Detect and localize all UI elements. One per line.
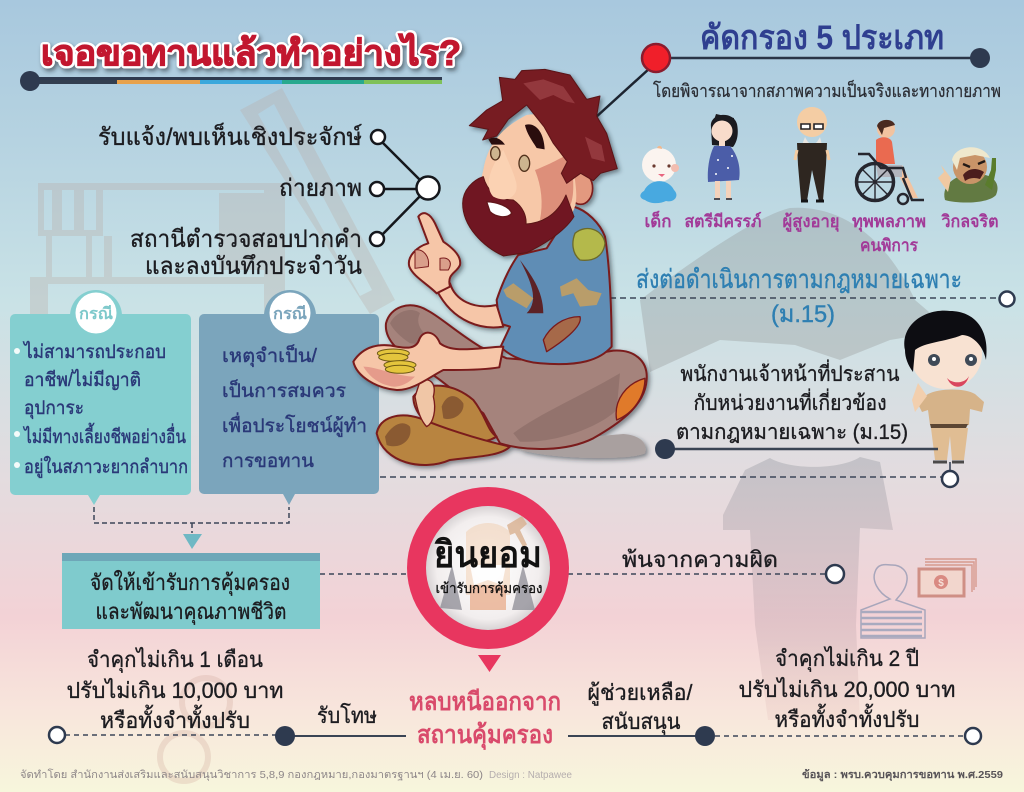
circle: consent to protection: ยินยอม: [434, 534, 542, 575]
icon: mentally ill man: [938, 147, 998, 203]
connector: man to red dot: [595, 68, 650, 118]
panel: case one: กรณี: [79, 304, 113, 323]
connector: three points to hub: [370, 130, 440, 246]
labels: five person types: สตรีมีครรภ์: [684, 211, 762, 231]
text: ways of finding a beggar: และลงบันทึกประจำวัน: [145, 253, 362, 280]
text: release from guilt: พ้นจากความผิด: [622, 547, 778, 572]
panel: case two: เพื่อประโยชน์ผู้ทำ: [222, 412, 367, 437]
front shoe: [377, 415, 510, 465]
watermark: handcuffs: [160, 678, 230, 781]
panel: case one: อาชีพ/ไม่มีญาติ: [24, 369, 141, 391]
text: penalty for beggar: จำคุกไม่เกิน 1 เดือน: [87, 647, 263, 673]
panel: case two: การขอทาน: [222, 451, 314, 472]
text: officer coordinates: ตามกฎหมายเฉพาะ (ม.15): [676, 421, 908, 444]
text: ways of finding a beggar: สถานีตำรวจสอบปากคำ: [130, 226, 362, 253]
watermark: hat silhouette: [640, 208, 950, 372]
footer: credit: จัดทำโดย สำนักงานส่งเสริมและสนับสนุนวิชาการ 5,8,9 กองกฎหมาย,กองมาตรฐานฯ (4 เม.ย. 60): [20, 768, 483, 781]
dashed line: shelter to consent: [320, 573, 408, 575]
icon: banknotes: $: [938, 578, 944, 589]
icon: baby: [640, 146, 679, 203]
elbow patch: [543, 317, 580, 352]
text: escape from shelter: สถานคุ้มครอง: [417, 721, 553, 751]
timeline: bottom penalties: [49, 726, 981, 746]
ear: [569, 172, 593, 204]
knee patch: [616, 378, 645, 420]
dashed line: consent to release: [568, 573, 826, 575]
circle: consent to protection: [407, 487, 569, 649]
text: refer to specific law: (ม.15): [771, 301, 835, 328]
text: penalty for helpers: จำคุกไม่เกิน 2 ปี: [775, 646, 919, 672]
watermark: torn shirt silhouette: [723, 457, 893, 720]
circle: consent to protection: เข้ารับการคุ้มครอง: [436, 580, 542, 597]
palm shade: [363, 367, 415, 387]
mouth: [487, 202, 512, 217]
dashed line: below the man: [380, 476, 945, 478]
raised hand: [409, 213, 460, 293]
line: officer timeline node: [655, 439, 938, 459]
text: penalty for beggar: [66, 647, 284, 733]
arrow: down to shelter box: [183, 534, 202, 549]
picture: court scene: [440, 516, 535, 610]
node: referral endpoint: [1000, 292, 1014, 306]
zigzag patches: [503, 278, 602, 308]
heading rule with dots: [642, 44, 990, 72]
icon: pregnant woman: [708, 114, 740, 199]
text: ways of finding a beggar: ถ่ายภาพ: [279, 175, 362, 202]
panel: protection and life development: จัดให้เข้ารับการคุ้มครอง: [90, 570, 290, 596]
text: accept penalty: รับโทษ: [317, 703, 377, 728]
text: helpers and supporters: ผู้ช่วยเหลือ/: [588, 680, 693, 706]
panel: case one: ไม่สามารถประกอบ: [22, 341, 166, 363]
ground shadow: [520, 434, 646, 458]
beard: [463, 177, 574, 256]
title: เจอขอทานแล้วทำอย่างไร?: [41, 32, 461, 73]
icon: banknotes: [919, 559, 976, 596]
title underline bar: [20, 71, 442, 91]
shirt tear: [520, 260, 543, 313]
panel: case one: [10, 290, 191, 505]
toes: [415, 380, 435, 427]
icon: elderly man: [795, 107, 829, 201]
text: escape from shelter: [409, 688, 561, 751]
trouser shading: [390, 310, 620, 442]
text: escape from shelter: หลบหนีออกจาก: [409, 688, 561, 716]
labels: five person types: คนพิการ: [860, 236, 919, 255]
shoulder patch: [573, 229, 605, 260]
hair: [469, 69, 617, 183]
face: [480, 114, 576, 242]
labels: five person types: ผู้สูงอายุ: [782, 212, 840, 233]
icon: prisoner: [861, 565, 925, 638]
text: officer coordinates: กับหน่วยงานที่เกี่ยวข้อง: [694, 388, 886, 415]
face shading: [535, 153, 573, 220]
watermark: bookshelf and law book: [30, 88, 395, 320]
text: refer to specific law: ส่งต่อดำเนินการตามกฎหมายเฉพาะ: [636, 264, 962, 294]
labels: five person types: ทุพพลภาพ: [852, 212, 926, 232]
labels: five person types: เด็ก: [644, 209, 672, 231]
eyebrows: [488, 124, 545, 149]
text: officer coordinates: พนักงานเจ้าหน้าที่ประสาน: [680, 359, 900, 386]
text: helpers and supporters: [588, 680, 693, 735]
shoe scuffs: [385, 396, 463, 446]
text: officer coordinates: [676, 359, 908, 444]
coins: [377, 349, 416, 373]
illustration: beggar sitting on the ground: [353, 69, 647, 465]
panel: protection and life development: และพัฒนาคุณภาพชีวิต: [96, 599, 286, 625]
finger shading: [415, 250, 450, 270]
node: officer endpoint: [942, 462, 958, 487]
text: penalty for helpers: หรือทั้งจำทั้งปรับ: [774, 704, 920, 732]
text: penalty for beggar: หรือทั้งจำทั้งปรับ: [100, 705, 250, 733]
icon: person in wheelchair: [856, 120, 924, 204]
lower hand: [353, 333, 503, 390]
dashed line: referral: [610, 297, 1000, 299]
text: ways of finding a beggar: รับแจ้ง/พบเห็นเชิงประจักษ์: [98, 122, 363, 151]
nose: [489, 150, 517, 199]
footer: credit: Design : Natpawee: [489, 770, 572, 781]
raised arm: [437, 283, 503, 327]
labels: five person types: [644, 209, 998, 255]
trousers: [386, 305, 647, 449]
eyes: [491, 147, 530, 171]
panel: case two: [199, 290, 379, 505]
text: ways of finding a beggar: [98, 122, 363, 280]
title: เจอขอทานแล้วทำอย่างไร?: [41, 32, 461, 73]
dashed connector: cases to shelter: [94, 507, 289, 533]
labels: five person types: วิกลจริต: [941, 212, 998, 231]
panel: case two: เหตุจำเป็น/: [222, 343, 318, 368]
text: penalty for helpers: ปรับไม่เกิน 20,000 บาท: [738, 677, 956, 702]
panel: case one: ไม่มีทางเลี้ยงชีพอย่างอื่น: [22, 423, 186, 448]
arrow: down to escape: [478, 655, 501, 672]
panel: case two: กรณี: [273, 304, 307, 323]
heading: screen five types: คัดกรอง 5 ประเภท: [700, 19, 944, 57]
shirt: [497, 207, 612, 364]
text: penalty for helpers: [738, 646, 956, 732]
text: penalty for beggar: ปรับไม่เกิน 10,000 บาท: [66, 678, 284, 703]
text: helpers and supporters: สนับสนุน: [602, 709, 680, 735]
upper shoe: [413, 386, 497, 443]
panel: case one: อยู่ในสภาวะยากลำบาก: [24, 456, 188, 478]
panel: case one: อุปการะ: [24, 398, 84, 420]
illustration: officer: [904, 311, 987, 462]
node: release endpoint: [826, 565, 844, 583]
hair highlights: [523, 79, 605, 162]
footer: source: ข้อมูล : พรบ.ควบคุมการขอทาน พ.ศ.2559: [802, 768, 1003, 782]
panel: case two: เป็นการสมควร: [222, 378, 346, 402]
panel: protection and life development: [62, 553, 320, 629]
text: refer to specific law: [636, 264, 962, 328]
